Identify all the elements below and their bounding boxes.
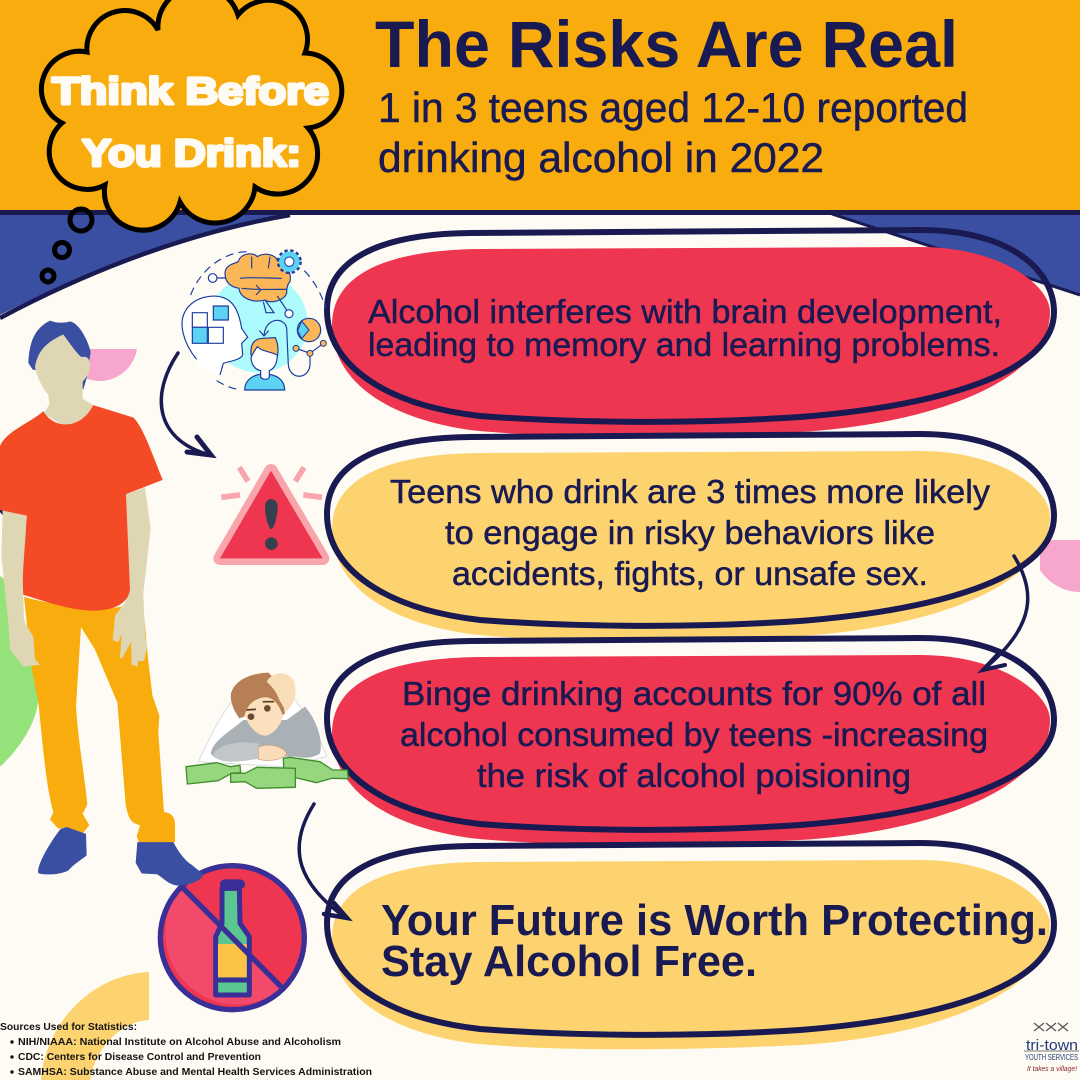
decorative pink half circle left: [85, 349, 137, 381]
header band: [0, 0, 1080, 215]
pie chart: [297, 318, 321, 342]
eyes: [248, 713, 254, 720]
figure: teen standing: [0, 321, 203, 886]
bubble 2: risky behaviors: Teens who drink are 3 times more likely: [390, 473, 991, 510]
sources: [0, 1022, 372, 1078]
arrow: bubble two to bubble three: [983, 556, 1028, 670]
bottles: [186, 757, 348, 788]
arrow: bubble three to bubble four: [299, 804, 347, 918]
thought bubbles: [42, 209, 92, 282]
blue corner top right: [832, 214, 1080, 295]
icon: no alcohol sign: [160, 866, 304, 1010]
face: [243, 697, 284, 736]
pillow: [198, 697, 327, 767]
brain: [225, 254, 290, 302]
cloud text: [52, 71, 329, 175]
thought cloud: [41, 0, 342, 282]
bubble 3: binge drinking: [327, 638, 1054, 844]
hair: [28, 321, 91, 389]
sources: CDC: Centers for Disease Control and Prevention: [18, 1052, 261, 1063]
head profile with puzzle: [182, 296, 248, 375]
bubble 1: brain development: Alcohol interferes with brain development,: [368, 293, 1002, 330]
bubble 2: risky behaviors: [327, 434, 1054, 640]
hand: [258, 745, 287, 760]
title: The Risks Are Real: [375, 7, 958, 81]
cyan circle: [209, 274, 308, 373]
decorative yellow arc bottom left: [41, 972, 149, 1080]
bubble 2: risky behaviors: accidents, fights, or unsafe sex.: [452, 555, 928, 592]
bubble 4: call to action: Your Future is Worth Protecting.: [381, 896, 1048, 945]
subtitle: 1 in 3 teens aged 12-10 reported: [378, 84, 968, 131]
logo: tri-town youth services: It takes a village!: [1027, 1066, 1077, 1073]
bubble 3: binge drinking: Binge drinking accounts for 90% of all: [402, 675, 986, 712]
sources: SAMHSA: Substance Abuse and Mental Health Services Administration: [18, 1067, 372, 1078]
subtitle: [378, 84, 968, 181]
arrow: bubble one to warning: [161, 353, 211, 455]
dashed ring: [191, 252, 326, 390]
arms and torso: [211, 707, 321, 761]
green blob behind figure: [0, 576, 38, 767]
subtitle: drinking alcohol in 2022: [378, 134, 824, 181]
sources: NIH/NIAAA: National Institute on Alcohol Abuse and Alcoholism: [18, 1037, 341, 1048]
bubble 4: call to action: [327, 843, 1054, 1049]
sources: Sources Used for Statistics:: [0, 1022, 137, 1033]
pants: [24, 597, 175, 844]
icon: sad teen with bottles: [186, 673, 348, 788]
bottle: [216, 888, 249, 995]
connector loop: [264, 320, 323, 376]
skin: [1, 335, 151, 667]
shirt: [0, 405, 163, 611]
shoes: [38, 827, 203, 886]
bubble 1: brain development: leading to memory and learning problems.: [368, 326, 1000, 363]
cloud text: You Drink:: [82, 133, 301, 175]
person: [245, 374, 285, 390]
bubble 3: binge drinking: the risk of alcohol poisioning: [477, 757, 911, 794]
icon: brain and head: [182, 250, 326, 390]
cloud text: Think Before: [52, 71, 329, 113]
bubble 2: risky behaviors: to engage in risky behaviors like: [445, 514, 935, 551]
gear: [282, 254, 297, 269]
icon: warning triangle: [220, 467, 323, 558]
logo: tri-town youth services: tri-town: [1026, 1037, 1078, 1054]
raised hand: [267, 673, 295, 712]
blue corner top left: [0, 214, 295, 318]
bubble 3: binge drinking: alcohol consumed by teens -increasing: [400, 716, 988, 753]
bubble 1: brain development: [327, 230, 1054, 436]
hair: [231, 673, 285, 718]
logo: tri-town youth services: [1024, 1023, 1079, 1073]
bubble 4: call to action: Stay Alcohol Free.: [381, 937, 757, 986]
decorative pink half circle right: [1040, 540, 1080, 592]
